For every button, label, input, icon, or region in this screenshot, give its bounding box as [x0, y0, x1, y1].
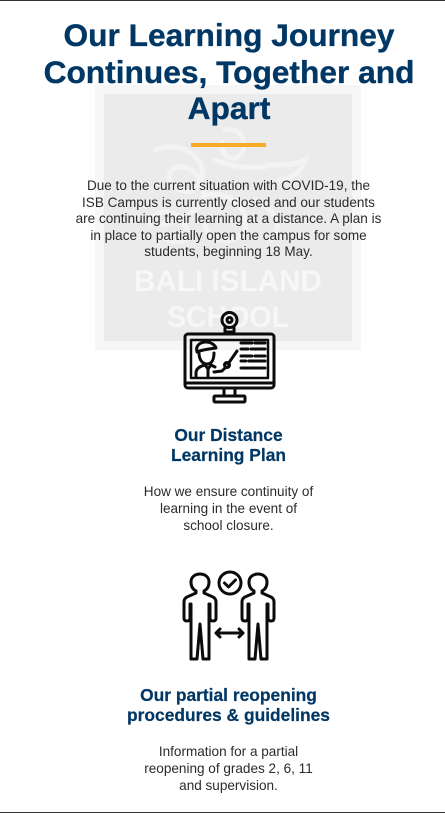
text: distance learning description: school closure. — [183, 518, 274, 532]
icon: two people distanced with check mark — [182, 570, 276, 660]
text: partial reopening description: and supervision. — [179, 778, 278, 792]
heading: Our Distance Learning Plan: Our Distance — [174, 425, 283, 445]
heading: Our partial reopening procedures & guidelines — [127, 685, 330, 725]
text: partial reopening description: Information for a partial — [159, 744, 298, 759]
intro paragraph: in place to partially open the campus for some — [90, 228, 367, 242]
accent underline — [191, 143, 266, 147]
text: partial reopening description: reopening of grades 2, 6, 11 — [144, 760, 313, 776]
title: Continues, Together and — [44, 54, 414, 90]
title: Our Learning Journey — [63, 17, 395, 53]
title — [44, 17, 414, 126]
text: partial reopening description — [144, 744, 313, 793]
heading: Our Distance Learning Plan: Learning Plan — [171, 445, 286, 465]
intro paragraph — [76, 178, 381, 259]
intro paragraph: ISB Campus is currently closed and our students — [82, 194, 375, 210]
text: distance learning description — [144, 484, 314, 532]
watermark: Bali Island School logo — [95, 85, 361, 350]
heading: Our partial reopening procedures & guidelines: procedures & guidelines — [127, 705, 330, 725]
text: distance learning description: How we ensure continuity of — [144, 484, 313, 499]
intro paragraph: students, beginning 18 May. — [144, 244, 313, 259]
title: Apart — [188, 90, 270, 126]
top border line — [0, 0, 445, 1]
heading: Our Distance Learning Plan — [171, 425, 286, 465]
intro paragraph: Due to the current situation with COVID-19, the — [87, 178, 370, 193]
heading: Our partial reopening procedures & guidelines: Our partial reopening — [140, 685, 317, 705]
text: distance learning description: learning in the event of — [160, 501, 297, 516]
bottom border line — [0, 812, 445, 813]
watermark: Bali Island School logo: BALI ISLAND — [134, 265, 322, 298]
watermark: Bali Island School logo: SCHOOL — [167, 301, 289, 334]
icon: monitor with teacher and webcam — [184, 311, 276, 404]
intro paragraph: are continuing their learning at a distance. A plan is — [76, 211, 381, 226]
